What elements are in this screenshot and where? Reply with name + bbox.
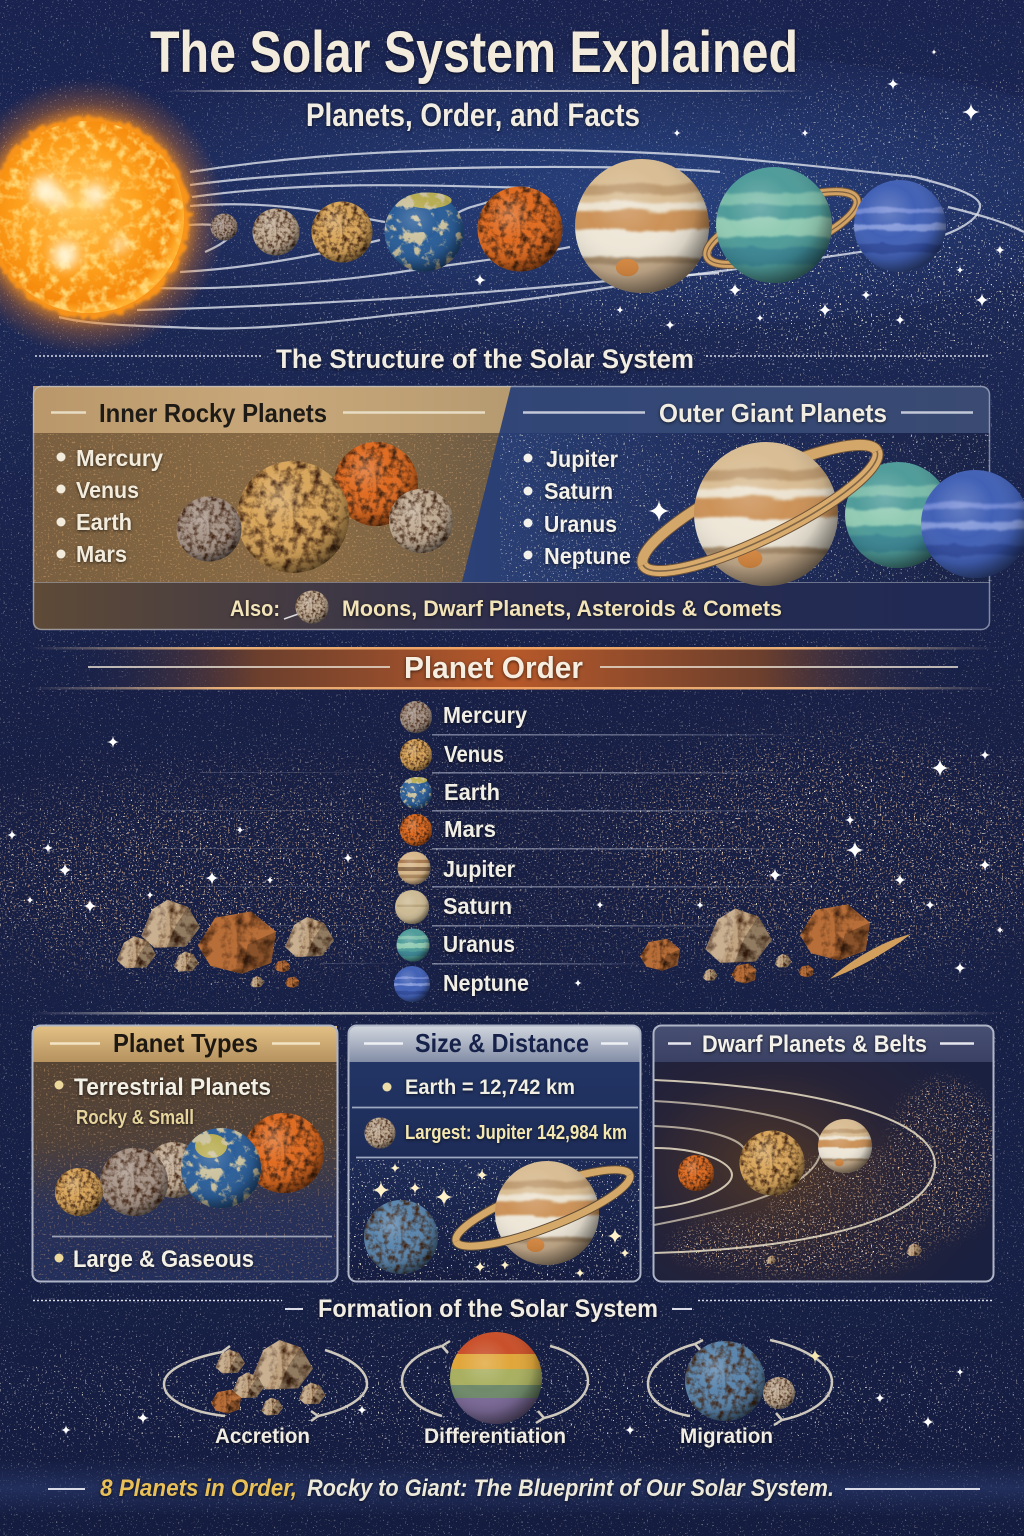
row: Mars <box>400 814 496 846</box>
planets: inner group <box>176 442 453 573</box>
row: Saturn: Saturn <box>443 893 512 919</box>
planets: terrestrial group <box>55 1113 324 1216</box>
planet: golden <box>312 202 372 262</box>
row: Mars: Mars <box>444 816 496 842</box>
section heading: planet order <box>30 647 995 690</box>
formation: differentiation <box>402 1332 588 1448</box>
stars <box>372 1163 630 1278</box>
text: terrestrial <box>54 1074 271 1129</box>
orbit lines <box>59 150 1024 328</box>
planets: dwarf group <box>678 1116 875 1196</box>
title: The Solar System Explained <box>150 20 798 85</box>
planet: Earth <box>384 192 464 272</box>
fact: largest planet: Largest: Jupiter 142,984 km <box>405 1122 627 1144</box>
list: outer planets: Neptune <box>544 543 631 569</box>
text: gaseous: Large & Gaseous <box>73 1246 254 1273</box>
label: Accretion <box>215 1425 310 1448</box>
formation: migration <box>648 1340 832 1448</box>
panel: size and distance <box>348 1026 640 1282</box>
right half: outer giant planets background <box>462 386 990 582</box>
icon: layered planet with arrows <box>402 1332 588 1424</box>
list: outer planets <box>524 446 631 569</box>
planet: Saturn with ring <box>699 161 865 289</box>
label: Differentiation <box>424 1425 566 1448</box>
heading: Size & Distance <box>415 1028 589 1058</box>
list: inner planets: Earth <box>76 509 132 535</box>
row: Uranus: Uranus <box>443 931 515 957</box>
divider <box>30 1012 1000 1014</box>
also row background <box>33 582 990 630</box>
icon: moon with streak <box>284 590 328 624</box>
planet: Venus <box>252 208 300 256</box>
row: Mercury: Mercury <box>443 702 527 728</box>
planets: Neptune and Saturn <box>364 1156 637 1274</box>
heading: Planet Types <box>113 1028 258 1058</box>
section heading: structure: The Structure of the Solar System <box>276 344 694 374</box>
planet: Mars <box>478 186 562 272</box>
small rocks <box>766 1243 922 1264</box>
row: Venus <box>400 739 504 771</box>
text: terrestrial: Terrestrial Planets <box>74 1074 271 1101</box>
fact: largest planet <box>364 1118 627 1148</box>
heading: outer giant planets: Outer Giant Planets <box>659 398 887 428</box>
hero: orbits and planets <box>0 79 1024 355</box>
formation: accretion <box>164 1340 367 1448</box>
list: outer planets: Saturn <box>544 478 613 504</box>
left half: inner rocky planets background <box>33 386 513 582</box>
row: Earth: Earth <box>444 779 500 805</box>
icon: orbiting rocks with arrows <box>164 1340 367 1421</box>
row: Jupiter <box>398 852 515 884</box>
row: Saturn <box>395 890 512 924</box>
also line: Moons, Dwarf Planets, Asteroids & Comets <box>342 596 782 621</box>
decorative lower stars <box>61 1368 964 1435</box>
subtitle: Planets, Order, and Facts <box>306 97 640 133</box>
icon: planet and moon with arrows <box>648 1340 832 1425</box>
list: outer planets: Uranus <box>544 511 617 537</box>
section heading: formation: Formation of the Solar System <box>318 1295 658 1323</box>
list: inner planets: Mercury <box>76 445 163 471</box>
planet: Mercury <box>210 214 238 240</box>
list: inner planets <box>56 445 163 567</box>
panel: structure <box>33 386 1024 630</box>
row: Uranus <box>395 927 515 963</box>
order list <box>160 701 832 1004</box>
also line: Also: <box>230 596 280 621</box>
footer tagline <box>0 1460 1024 1516</box>
planet: Neptune <box>849 175 951 277</box>
footer tagline: Rocky to Giant: The Blueprint of Our Solar System. <box>307 1475 834 1502</box>
planets: outer group <box>630 424 1024 593</box>
decorative order stars <box>7 736 1004 987</box>
orbit rings <box>654 1080 935 1253</box>
row: Jupiter: Jupiter <box>443 856 515 882</box>
heading: Dwarf Planets & Belts <box>702 1031 927 1058</box>
list: outer planets: Jupiter <box>546 446 618 472</box>
row: Earth <box>400 777 500 809</box>
sun <box>0 79 226 355</box>
decorative hero stars <box>474 49 1005 330</box>
row: Mercury <box>400 701 527 733</box>
row: Neptune: Neptune <box>443 970 529 996</box>
list: inner planets: Mars <box>76 541 127 567</box>
heading: inner rocky planets: Inner Rocky Planets <box>99 398 327 428</box>
list: inner planets: Venus <box>76 477 139 503</box>
row: Venus: Venus <box>444 741 504 767</box>
also line <box>230 590 782 624</box>
panel: dwarf planets and belts <box>654 1026 994 1282</box>
asteroids: left cluster <box>117 900 334 988</box>
text: terrestrial: Rocky & Small <box>76 1107 194 1129</box>
row lines <box>160 734 832 965</box>
footer tagline: 8 Planets in Order, <box>100 1475 297 1502</box>
fact: earth diameter: Earth = 12,742 km <box>405 1076 575 1099</box>
row: Neptune <box>392 964 529 1004</box>
label: Migration <box>680 1425 773 1448</box>
title underline <box>165 90 805 92</box>
planet: Jupiter <box>568 152 716 300</box>
asteroids: right cluster with comet <box>640 904 911 984</box>
panel: planet types <box>32 1026 338 1282</box>
section heading: planet order: Planet Order <box>404 650 583 685</box>
